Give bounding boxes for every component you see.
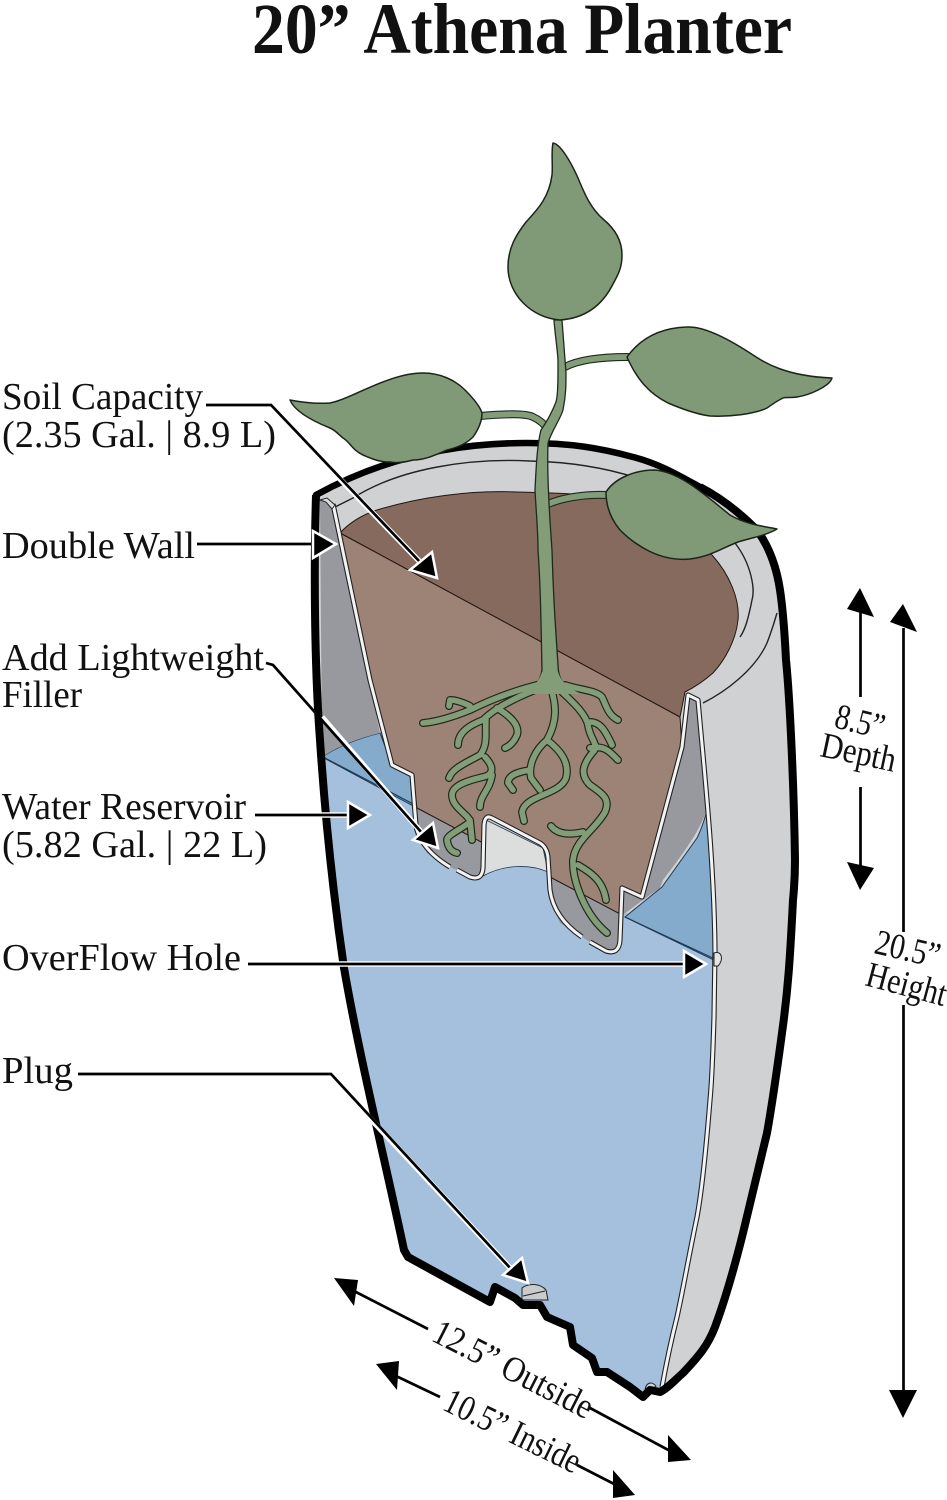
water reservoir back right [625,803,715,959]
soil cross-section [340,533,682,914]
soil back surface [340,492,738,717]
label: soil capacity [2,376,437,578]
lower right leaf [606,470,777,559]
arrow: water reservoir [255,802,370,828]
water reservoir back left [322,733,417,808]
label: plug [2,1050,528,1283]
water reservoir front [320,757,715,1397]
arrow: double wall [197,531,336,558]
label: add lightweight filler: Add Lightweight [2,637,264,679]
plant stem [520,320,580,693]
top leaf [508,143,622,320]
dimension: depth [817,588,900,890]
dimension: depth: 8.5” [831,696,889,747]
double wall outline [320,498,715,1387]
dimension: inside width: 10.5” Inside [437,1380,588,1481]
dimension: outside width [334,1278,691,1462]
dimension: height [862,604,947,1418]
plant [290,143,832,933]
label: soil capacity: Soil Capacity [2,376,203,418]
planter cutaway illustration [315,443,795,1397]
label: water reservoir: Water Reservoir [2,786,246,828]
overflow hole [714,952,721,966]
label: overflow hole: OverFlow Hole [2,937,241,979]
left foot [417,808,483,878]
label: overflow hole [2,937,706,979]
label: soil capacity: (2.35 Gal. | 8.9 L) [2,414,276,456]
dimension: outside width: 12.5” Outside [426,1311,600,1427]
label: add lightweight filler: Filler [2,674,82,716]
arrow: plug [78,1074,528,1283]
plug [522,1284,548,1300]
label: double wall [2,525,336,567]
rim contour lines [335,460,777,703]
inner wall gap left [320,499,380,757]
right foot [550,877,620,952]
centre notch [483,820,548,876]
left leaf [290,373,482,463]
roots [423,672,618,933]
bottom drain detail [645,1383,656,1392]
dimension: depth: Depth [817,725,900,780]
planter outer body [315,443,795,1397]
label: water reservoir: (5.82 Gal. | 22 L) [2,824,267,866]
inner wall gap right [620,697,709,917]
dimension: inside width [376,1361,635,1498]
label: add lightweight filler [2,637,438,848]
plant branches [480,357,628,505]
waterline [323,757,714,960]
arrow: filler [266,663,438,848]
label: double wall: Double Wall [2,525,195,567]
planter black outline [315,443,795,1397]
label: plug: Plug [2,1050,73,1092]
right leaf [627,327,832,416]
arrow: soil capacity [206,405,437,578]
arrow: overflow hole [248,951,706,977]
label: water reservoir [2,786,370,866]
